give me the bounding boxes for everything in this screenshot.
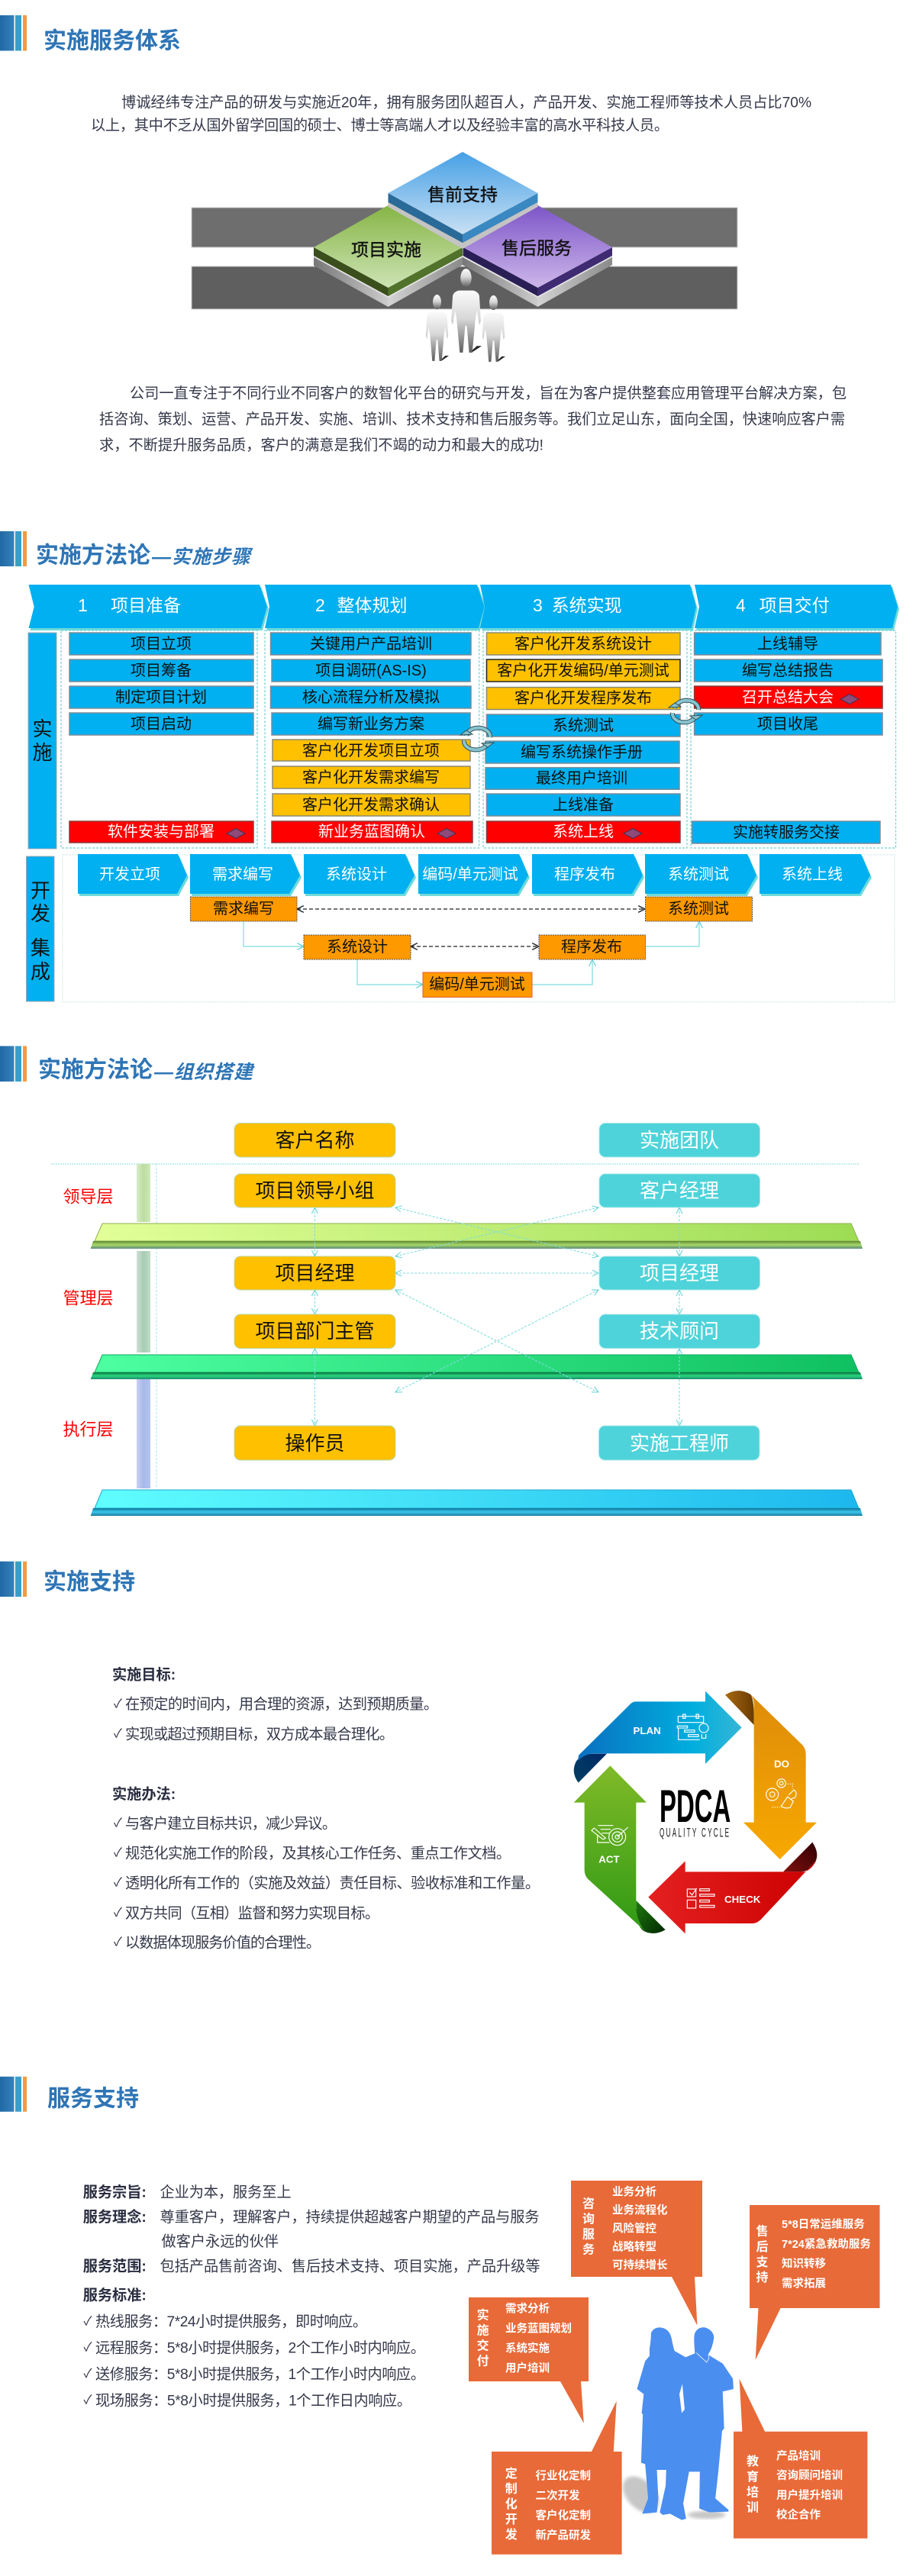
platform: management bbox=[91, 1355, 863, 1379]
callout: education and training bbox=[734, 2379, 867, 2539]
client side boxes bbox=[234, 1124, 395, 1460]
heading bbox=[36, 543, 253, 568]
CHECK arrow bbox=[648, 1843, 817, 1933]
PDCA title bbox=[660, 1780, 731, 1839]
service statement text: 服务宗旨: bbox=[83, 2183, 147, 2201]
side label: development integration bbox=[26, 856, 54, 1001]
callout: custom development: 化 bbox=[505, 2497, 518, 2511]
service statement text: 远程服务：5*8小时提供服务，2个工作小时内响应。 bbox=[95, 2340, 425, 2357]
goals and methods text: 实施办法: bbox=[112, 1785, 176, 1803]
column 4: project delivery: 项目收尾 bbox=[757, 715, 818, 733]
goals and methods text: 在预定的时间内，用合理的资源，达到预期质量。 bbox=[125, 1696, 438, 1713]
service statement text: 热线服务：7*24小时提供服务，即时响应。 bbox=[95, 2313, 367, 2330]
layer labels: 领导层 bbox=[63, 1188, 114, 1206]
goals and methods text: 规范化实施工作的阶段，及其核心工作任务、重点工作文档。 bbox=[125, 1846, 511, 1862]
PDCA cycle diagram: QUALITY CYCLE bbox=[660, 1825, 731, 1839]
callout: education and training: 产品培训 bbox=[776, 2449, 821, 2462]
goals and methods text: 实现或超过预期目标，双方成本最合理化。 bbox=[125, 1726, 394, 1743]
goals and methods text: ✓ bbox=[114, 1847, 122, 1859]
callout: consulting services: 服 bbox=[582, 2229, 595, 2241]
column 3: system build: 最终用户培训 bbox=[536, 769, 627, 787]
column 4: project delivery: 上线辅导 bbox=[757, 635, 818, 653]
column 3: system build: 上线准备 bbox=[553, 796, 614, 814]
PLAN arrow: PLAN bbox=[634, 1725, 661, 1736]
development step chevrons: 程序发布 bbox=[554, 866, 615, 883]
layer labels: 执行层 bbox=[63, 1420, 114, 1440]
callout: implementation delivery: 需求分析 bbox=[505, 2301, 550, 2315]
layer labels bbox=[63, 1188, 114, 1440]
callout: implementation delivery bbox=[469, 2297, 589, 2423]
callout: after-sales support: 支 bbox=[756, 2255, 769, 2269]
diamond: pre-sales support bbox=[388, 152, 537, 234]
ACT arrow: ACT bbox=[598, 1853, 620, 1865]
phase chevrons: 2 bbox=[315, 595, 325, 615]
callout: implementation delivery: 实 bbox=[477, 2308, 489, 2322]
phase chevrons: 整体规划 bbox=[337, 595, 408, 615]
V-model connectors bbox=[244, 909, 699, 985]
callout: education and training: 校企合作 bbox=[776, 2508, 821, 2522]
section: methodology steps bbox=[0, 531, 899, 1002]
service statement text: 现场服务：5*8小时提供服务，1个工作日内响应。 bbox=[95, 2392, 411, 2409]
section marker bars bbox=[0, 1046, 27, 1082]
side label: development integration: 发 bbox=[31, 902, 50, 925]
development step chevrons: 系统上线 bbox=[782, 866, 843, 883]
side label: implementation bbox=[28, 633, 56, 849]
service statement text: 送修服务：5*8小时提供服务，1个工作小时内响应。 bbox=[95, 2366, 425, 2383]
goals and methods text: 与客户建立目标共识，减少异议。 bbox=[125, 1815, 337, 1832]
column 1: project preparation: 项目筹备 bbox=[131, 662, 192, 679]
company paragraph bbox=[99, 385, 847, 453]
client side boxes: 项目领导小组 bbox=[255, 1179, 375, 1202]
development step chevrons: 系统设计 bbox=[326, 866, 387, 883]
callout: custom development: 二次开发 bbox=[536, 2488, 580, 2502]
client side boxes: 客户名称 bbox=[275, 1129, 355, 1152]
implementation team boxes: 实施工程师 bbox=[630, 1432, 729, 1455]
diamond: project implementation: 项目实施 bbox=[351, 240, 421, 260]
phase chevrons: 项目准备 bbox=[111, 595, 181, 615]
PDCA title: PDCA bbox=[660, 1780, 731, 1832]
layer labels: 管理层 bbox=[63, 1288, 114, 1308]
goals and methods text: ✓ bbox=[114, 1697, 122, 1711]
implementation team boxes: 实施团队 bbox=[640, 1129, 719, 1152]
goals and methods text: ✓ bbox=[114, 1876, 122, 1890]
service statement text: 包括产品售前咨询、售后技术支持、项目实施，产品升级等 bbox=[160, 2258, 540, 2275]
callout: implementation delivery: 施 bbox=[477, 2323, 489, 2337]
callout: custom development bbox=[492, 2401, 622, 2555]
side label: development integration: 开 bbox=[31, 879, 50, 902]
callout: implementation delivery: 交 bbox=[477, 2339, 489, 2352]
development step chevrons bbox=[78, 854, 872, 896]
callout: implementation delivery: 业务蓝图规划 bbox=[505, 2321, 572, 2335]
column 1: project preparation bbox=[69, 633, 253, 843]
callout: after-sales support bbox=[750, 2205, 879, 2360]
column 1: project preparation: 软件安装与部署 bbox=[108, 823, 214, 840]
side label: implementation: 施 bbox=[32, 741, 53, 764]
goals and methods text: ✓ bbox=[114, 1817, 122, 1830]
goals and methods text: ✓ bbox=[114, 1936, 122, 1949]
callout: after-sales support: 持 bbox=[756, 2271, 769, 2284]
callout: consulting services bbox=[571, 2181, 702, 2326]
side label: implementation: 实 bbox=[32, 717, 53, 740]
column 1: project preparation: 项目立项 bbox=[131, 635, 192, 653]
platform: execution bbox=[91, 1490, 863, 1516]
column 2: overall planning: 核心流程分析及模拟 bbox=[302, 688, 440, 706]
callout: custom development: 发 bbox=[505, 2527, 518, 2542]
intro paragraph: 以上，其中不乏从国外留学回国的硕士、博士等高端人才以及经验丰富的高水平科技人员。 bbox=[91, 118, 669, 134]
goals and methods text: 双方共同（互相）监督和努力实现目标。 bbox=[125, 1905, 379, 1922]
column 1: project preparation: 项目启动 bbox=[131, 715, 192, 733]
vertical layer bars bbox=[137, 1164, 150, 1488]
phase chevrons: 1 bbox=[78, 595, 88, 615]
callout: education and training: 用户提升培训 bbox=[776, 2488, 843, 2502]
callout: custom development: 制 bbox=[505, 2482, 518, 2496]
callout: consulting services: 务 bbox=[582, 2242, 595, 2256]
development step chevrons: 系统测试 bbox=[668, 866, 729, 883]
callout: custom development: 开 bbox=[505, 2513, 518, 2526]
company paragraph: 求，不断提升服务品质，客户的满意是我们不竭的动力和最大的成功! bbox=[99, 437, 543, 453]
relationship arrows bbox=[314, 1207, 679, 1426]
column 4: project delivery bbox=[692, 633, 882, 843]
callout: education and training: 培 bbox=[747, 2485, 759, 2499]
service statement text: ✓ bbox=[84, 2342, 92, 2354]
callout: consulting services: 询 bbox=[582, 2212, 595, 2226]
callout: after-sales support: 5*8日常运维服务 bbox=[782, 2217, 865, 2231]
V-model boxes: 编码/单元测试 bbox=[429, 975, 525, 993]
heading: —实施步骤 bbox=[151, 546, 253, 568]
V-model boxes: 程序发布 bbox=[561, 938, 622, 956]
V-model boxes: 系统设计 bbox=[327, 938, 388, 956]
callout: implementation delivery: 用户培训 bbox=[505, 2361, 550, 2374]
icon: three people bbox=[426, 269, 505, 362]
goals and methods text: 以数据体现服务价值的合理性。 bbox=[125, 1934, 321, 1951]
column 4: project delivery: 编写总结报告 bbox=[742, 662, 834, 679]
CHECK arrow: CHECK bbox=[724, 1894, 761, 1905]
side label: development integration: 成 bbox=[31, 960, 50, 983]
icon: cycle arrows between phase 2 and 3 bbox=[460, 728, 494, 750]
column 2: overall planning: 客户化开发需求确认 bbox=[302, 796, 440, 814]
service statement text: ✓ bbox=[84, 2316, 92, 2328]
goals and methods text: ✓ bbox=[114, 1728, 122, 1740]
heading: 实施支持 bbox=[44, 1569, 135, 1595]
column 2: overall planning: 编写新业务方案 bbox=[318, 715, 424, 733]
callout: implementation delivery: 付 bbox=[477, 2354, 489, 2368]
section marker bars bbox=[0, 15, 27, 50]
callout: implementation delivery: 系统实施 bbox=[505, 2341, 550, 2355]
DO arrow: DO bbox=[774, 1758, 789, 1769]
development step chevrons: 需求编写 bbox=[212, 866, 273, 883]
goals and methods text: ✓ bbox=[114, 1907, 122, 1920]
column 3: system build: 客户化开发系统设计 bbox=[514, 635, 652, 653]
column 2: overall planning: 客户化开发需求编写 bbox=[302, 769, 440, 786]
heading: 实施方法论 bbox=[36, 543, 150, 568]
callout: after-sales support: 需求拓展 bbox=[782, 2277, 826, 2291]
column 3: system build: 编写系统操作手册 bbox=[521, 743, 643, 761]
column 3: system build: 客户化开发程序发布 bbox=[514, 689, 652, 707]
callout: consulting services: 风险管控 bbox=[612, 2222, 656, 2236]
icon: cycle arrows between phase 3 and 4 bbox=[669, 701, 702, 722]
service statement text: ✓ bbox=[84, 2368, 92, 2381]
section: implementation support bbox=[0, 1562, 817, 1951]
implementation team boxes bbox=[598, 1124, 760, 1460]
column 2: overall planning bbox=[270, 633, 473, 843]
callout: after-sales support: 后 bbox=[756, 2240, 769, 2254]
column 2: overall planning: 客户化开发项目立项 bbox=[302, 742, 440, 759]
callout: education and training: 育 bbox=[747, 2470, 759, 2484]
callout: consulting services: 战略转型 bbox=[612, 2240, 656, 2254]
service diamond diagram bbox=[192, 152, 737, 362]
goals and methods text: 透明化所有工作的（实施及效益）责任目标、验收标准和工作量。 bbox=[125, 1875, 540, 1891]
PLAN arrow bbox=[574, 1691, 742, 1783]
column 4: project delivery: 实施转服务交接 bbox=[733, 824, 840, 841]
heading: 实施服务体系 bbox=[44, 29, 181, 53]
diamond: after-sales service: 售后服务 bbox=[502, 238, 572, 258]
service statement text: 服务理念: bbox=[83, 2208, 147, 2226]
column 2: overall planning: 新业务蓝图确认 bbox=[318, 823, 425, 840]
diamond: after-sales service bbox=[463, 205, 612, 288]
callout: after-sales support: 售 bbox=[756, 2224, 769, 2238]
callout: after-sales support: 知识转移 bbox=[782, 2258, 826, 2271]
implementation team boxes: 项目经理 bbox=[640, 1262, 719, 1285]
phase chevrons: 项目交付 bbox=[760, 595, 830, 615]
callout: custom development: 行业化定制 bbox=[536, 2468, 591, 2482]
goals and methods text bbox=[112, 1665, 540, 1951]
column 3: system build: 系统测试 bbox=[553, 717, 614, 734]
column 3: system build: 系统上线 bbox=[553, 823, 614, 840]
section: service support bbox=[0, 2077, 879, 2555]
heading bbox=[38, 1058, 255, 1083]
column 2: overall planning: 关键用户产品培训 bbox=[310, 635, 432, 653]
callout: consulting services: 可持续增长 bbox=[612, 2258, 668, 2272]
phase chevrons bbox=[29, 585, 899, 630]
column 2: overall planning: 项目调研(AS-IS) bbox=[315, 662, 427, 679]
callout: custom development: 客户化定制 bbox=[536, 2508, 591, 2522]
company paragraph: 括咨询、策划、运营、产品开发、实施、培训、技术支持和售后服务等。我们立足山东，面向全国，快速响应客户需 bbox=[99, 411, 845, 427]
V-model boxes: 需求编写 bbox=[213, 900, 274, 917]
implementation team boxes: 客户经理 bbox=[640, 1179, 719, 1202]
client side boxes: 项目经理 bbox=[275, 1262, 355, 1285]
section: implementation service system bbox=[0, 15, 847, 453]
development step chevrons: 编码/单元测试 bbox=[422, 866, 518, 883]
PDCA cycle diagram bbox=[574, 1691, 817, 1933]
diamond: project implementation bbox=[314, 205, 463, 288]
heading: —组织搭建 bbox=[153, 1062, 255, 1083]
callout: consulting services: 业务分析 bbox=[612, 2185, 656, 2199]
column 1: project preparation: 制定项目计划 bbox=[115, 688, 207, 706]
V-model boxes: 系统测试 bbox=[668, 900, 729, 917]
callout: after-sales support: 7*24紧急救助服务 bbox=[782, 2237, 871, 2251]
heading: 服务支持 bbox=[47, 2087, 139, 2111]
platform: leadership bbox=[91, 1224, 863, 1249]
callout: education and training: 教 bbox=[747, 2454, 759, 2468]
callout: custom development: 定 bbox=[505, 2466, 518, 2481]
service statement text bbox=[83, 2183, 540, 2409]
column 3: system build: 客户化开发编码/单元测试 bbox=[497, 662, 669, 679]
side label: development integration: 集 bbox=[31, 937, 50, 959]
service statement text: 服务范围: bbox=[83, 2258, 147, 2275]
V-model boxes bbox=[190, 897, 752, 997]
company paragraph: 公司一直专注于不同行业不同客户的数智化平台的研究与开发，旨在为客户提供整套应用管理平台解决方案，包 bbox=[130, 385, 847, 401]
column 4: project delivery: 召开总结大会 bbox=[742, 688, 834, 706]
heading: 实施方法论 bbox=[38, 1058, 153, 1082]
ACT arrow bbox=[574, 1765, 666, 1933]
section marker bars bbox=[0, 1562, 27, 1597]
callout: education and training: 训 bbox=[747, 2500, 759, 2514]
phase chevrons: 4 bbox=[736, 595, 746, 615]
section marker bars bbox=[0, 531, 27, 566]
intro paragraph: 博诚经纬专注产品的研发与实施近20年，拥有服务团队超百人，产品开发、实施工程师等技术人员占比70% bbox=[121, 95, 811, 111]
service statement text: 尊重客户，理解客户，持续提供超越客户期望的产品与服务 bbox=[160, 2209, 539, 2226]
intro paragraph bbox=[91, 95, 811, 134]
phase chevrons: 3 bbox=[533, 595, 543, 615]
service statement text: 企业为本，服务至上 bbox=[160, 2184, 292, 2201]
section: methodology organization bbox=[0, 1046, 863, 1516]
callout: consulting services: 咨 bbox=[582, 2197, 595, 2210]
goals and methods text: 实施目标: bbox=[112, 1665, 176, 1684]
column 3: system build bbox=[485, 633, 680, 843]
service statement text: ✓ bbox=[84, 2394, 92, 2407]
DO arrow bbox=[725, 1691, 817, 1859]
section marker bars bbox=[0, 2077, 27, 2112]
callout: education and training: 咨询顾问培训 bbox=[776, 2468, 843, 2482]
phase chevrons: 系统实现 bbox=[552, 595, 622, 615]
diamond: pre-sales support: 售前支持 bbox=[427, 185, 498, 205]
development step chevrons: 开发立项 bbox=[99, 866, 160, 883]
implementation team boxes: 技术顾问 bbox=[640, 1320, 719, 1343]
client side boxes: 操作员 bbox=[285, 1432, 345, 1455]
callout: consulting services: 业务流程化 bbox=[612, 2204, 668, 2217]
service statement text: 服务标准: bbox=[83, 2287, 147, 2304]
service statement text: 做客户永远的伙伴 bbox=[162, 2233, 279, 2250]
illustration: business people silhouette bbox=[615, 2327, 734, 2520]
client side boxes: 项目部门主管 bbox=[255, 1320, 375, 1343]
callout: custom development: 新产品研发 bbox=[536, 2528, 591, 2542]
